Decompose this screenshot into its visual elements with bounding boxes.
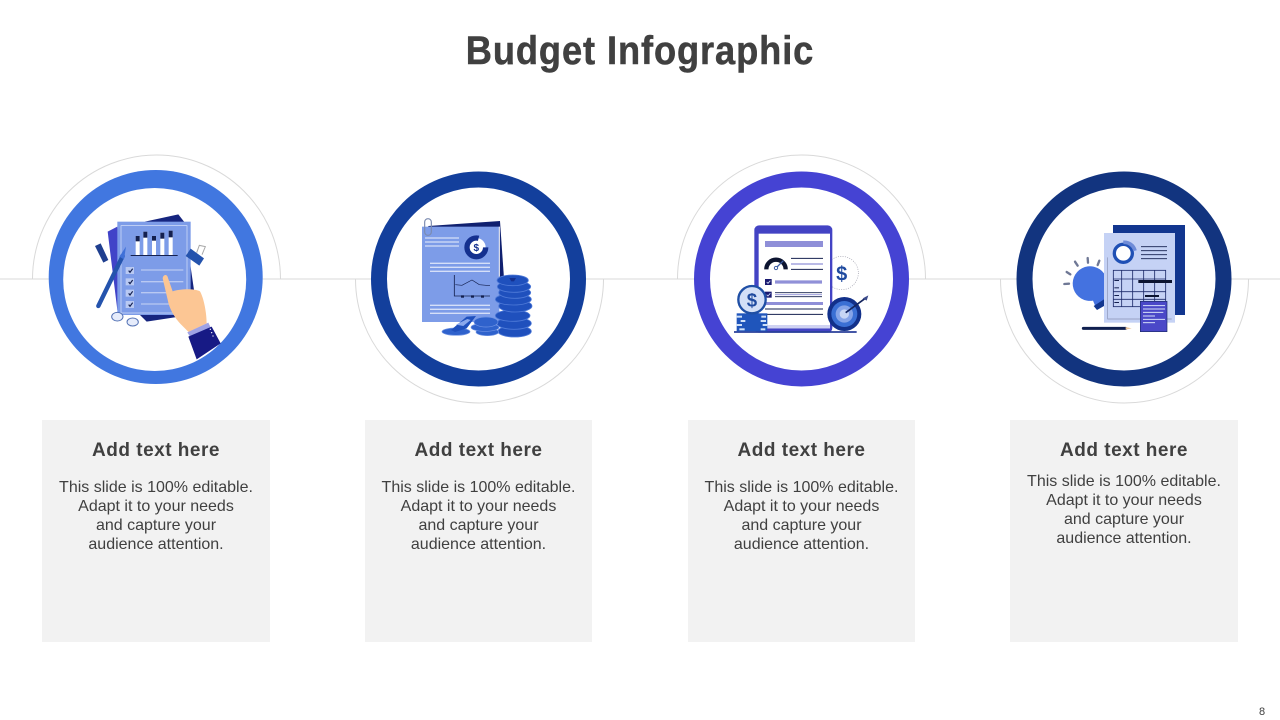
- panel: text box 2: Adapt it to your needs: [401, 498, 556, 515]
- icon: spreadsheet with light bulb: [1064, 225, 1185, 332]
- panel: text box 1: [42, 420, 270, 642]
- panel: text box 3: audience attention.: [734, 536, 869, 553]
- panel: text box 4: and capture your: [1064, 511, 1184, 528]
- icon: budget document with coins: [422, 219, 532, 337]
- page number: 8: [1259, 706, 1265, 718]
- panel: text box 3: This slide is 100% editable.: [705, 479, 898, 496]
- ring 3: [702, 180, 901, 378]
- panel: text box 4: Adapt it to your needs: [1046, 492, 1202, 509]
- panel: text box 1: Add text here: [92, 440, 220, 460]
- panel: text box 1: audience attention.: [88, 536, 224, 553]
- icon: report tablet with target and coin: [734, 225, 868, 333]
- panel: text box 4: audience attention.: [1056, 530, 1192, 547]
- panel: text box 2: Add text here: [415, 440, 542, 460]
- panel: text box 4: [1010, 420, 1238, 642]
- icon: budget document with coins: $: [474, 243, 480, 254]
- panel: text box 2: and capture your: [418, 517, 539, 534]
- panel: text box 4: Add text here: [1060, 440, 1188, 460]
- panel: text box 2: audience attention.: [411, 536, 546, 553]
- icon: report tablet with target and coin: $: [747, 290, 758, 311]
- ring 1: [49, 170, 263, 384]
- panel: text box 2: [365, 420, 592, 642]
- title: Budget Infographic: [466, 29, 814, 73]
- ring 2: [379, 180, 578, 378]
- panel: text box 2: This slide is 100% editable.: [382, 479, 575, 496]
- icon: checklist with pointing hand: [95, 214, 221, 359]
- ring 4: [1024, 180, 1224, 378]
- panel: text box 1: and capture your: [96, 517, 216, 534]
- panel: text box 1: Adapt it to your needs: [78, 498, 234, 515]
- panel: text box 4: This slide is 100% editable.: [1027, 473, 1221, 490]
- panel: text box 3: Adapt it to your needs: [724, 498, 879, 515]
- panel: text box 3: [688, 420, 915, 642]
- panel: text box 3: Add text here: [738, 440, 865, 460]
- panel: text box 1: This slide is 100% editable.: [59, 479, 253, 496]
- panel: text box 3: and capture your: [741, 517, 862, 534]
- icon: report tablet with target and coin: $: [836, 263, 847, 285]
